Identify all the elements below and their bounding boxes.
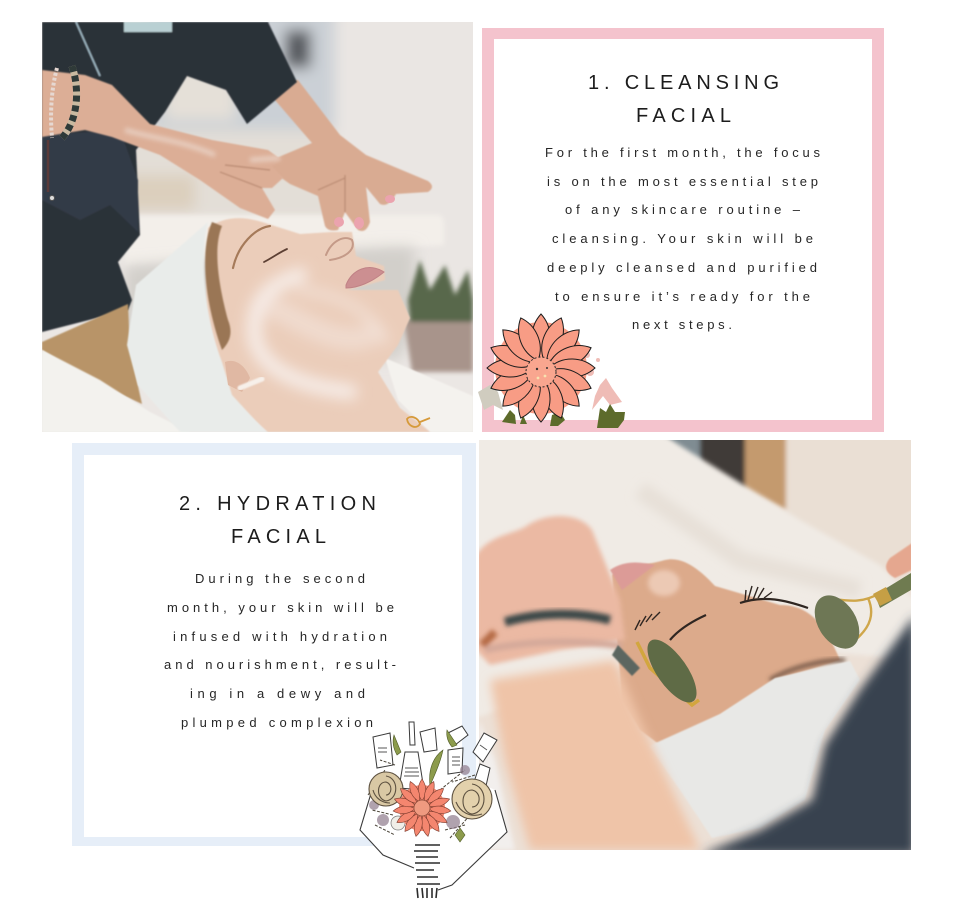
wrapped stems and fingers (414, 845, 440, 898)
cream rose left (369, 772, 403, 806)
text: cleansing description (545, 145, 820, 332)
foam on therapist arm (125, 130, 280, 160)
product labels (378, 745, 487, 776)
blurred bracelets (482, 614, 622, 650)
therapist arm (490, 660, 700, 850)
therapist fingertip (886, 543, 912, 578)
cream rose right (452, 779, 492, 819)
blue frame (72, 443, 476, 846)
panel: 2. hydration facial (72, 443, 476, 846)
heading: hydration facial (179, 493, 376, 548)
background: plant pot (404, 260, 473, 372)
text: cleansing description: deeply cleansed and purified (547, 260, 817, 275)
product bottles (373, 722, 497, 790)
client hair at hairline (205, 222, 230, 350)
nose highlight (648, 570, 680, 596)
eyelashes and brows (635, 586, 808, 640)
panel: 1. cleansing facial (482, 28, 884, 432)
cleansing foam on face (254, 275, 385, 392)
jade roller on forehead (806, 573, 911, 657)
green leaves (393, 730, 465, 842)
bracelets (48, 66, 77, 200)
client face (612, 559, 840, 745)
heading: hydration facial: FACIAL (231, 526, 326, 548)
text: cleansing description: cleansing. Your skin will be (552, 231, 813, 246)
salmon gerbera (393, 779, 451, 837)
text: hydration description: infused with hydration (173, 629, 387, 644)
background: counter (125, 215, 444, 266)
jade roller near eye (612, 632, 706, 710)
gold necklace (407, 417, 430, 427)
therapist right arm and hand (262, 80, 432, 231)
text: cleansing description: next steps. (632, 317, 732, 332)
text: hydration description: During the second (195, 571, 365, 586)
background: shelves and wall (120, 10, 485, 350)
text: hydration description: and nourishment, result- (164, 657, 396, 672)
illustration: bouquet of products and flowers held by arms (359, 722, 508, 898)
text: cleansing description: to ensure it’s ready for the (555, 289, 810, 304)
heading: cleansing facial (588, 72, 779, 127)
dark shoulder of therapist (700, 615, 915, 855)
finger separations (220, 165, 345, 212)
client face (205, 218, 430, 432)
hairline (770, 660, 845, 680)
therapist fingernails (334, 195, 395, 229)
facial features (233, 226, 384, 288)
white blossom (391, 816, 405, 830)
flower head (487, 314, 595, 422)
paper head cap (127, 222, 266, 432)
olive foliage (502, 404, 625, 428)
text: cleansing description: is on the most essential step (547, 174, 818, 189)
text: hydration description: month, your skin will be (167, 600, 394, 615)
therapist uniform (42, 22, 297, 332)
illustration: salmon daisy with leaves (478, 313, 625, 428)
ear (225, 361, 250, 392)
pale corner below the arm (479, 720, 515, 850)
background: wall and wood (655, 430, 921, 570)
lips (610, 563, 655, 590)
heading: hydration facial: 2. HYDRATION (179, 493, 376, 515)
photo: therapist cleansing client's face (42, 22, 473, 432)
white towel (42, 350, 473, 432)
text: cleansing description: For the first month, the focus (545, 145, 820, 160)
text: hydration description (164, 571, 396, 730)
therapist left arm and hand (42, 70, 283, 219)
photo: jade roller on client's face (479, 440, 911, 850)
heading: cleansing facial: FACIAL (636, 105, 731, 127)
text: cleansing description: of any skincare routine – (565, 202, 801, 217)
pink frame (482, 28, 884, 432)
dark sprigs between stems (368, 760, 475, 838)
heading: cleansing facial: 1. CLEANSING (588, 72, 779, 94)
pillow towel (470, 430, 915, 720)
arms holding bouquet (360, 760, 507, 898)
therapist fist (476, 516, 625, 665)
filler flowers (369, 765, 470, 829)
white head wrap (649, 661, 860, 838)
text: hydration description: plumped complexion (181, 715, 373, 730)
blonde hair (42, 304, 142, 404)
grey leaves (478, 385, 503, 410)
pink splatter (584, 352, 622, 410)
text: hydration description: ing in a dewy and (190, 686, 365, 701)
